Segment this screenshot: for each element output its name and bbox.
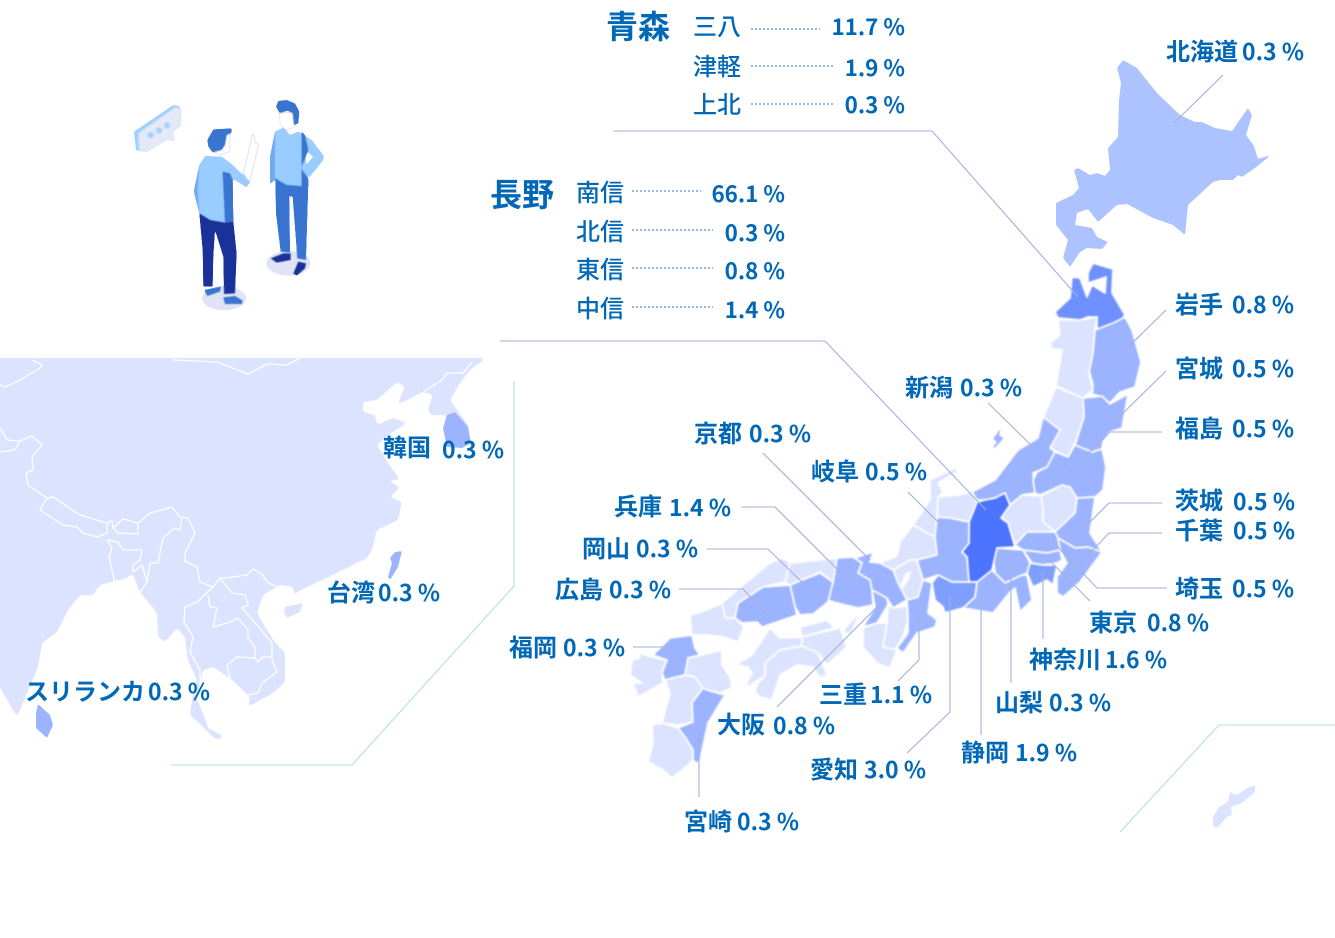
leader lines [500, 75, 1223, 797]
nara [883, 605, 908, 650]
yamagata [1043, 387, 1084, 457]
hyogo [828, 557, 873, 608]
miyazaki [678, 688, 725, 764]
label: kanagawa [1029, 640, 1167, 675]
row: kamikita: 0.3 % [845, 88, 905, 120]
label: aichi [810, 750, 926, 785]
kagoshima [648, 723, 693, 778]
okinawa frame line [1120, 725, 1335, 832]
label: ibaraki [1175, 481, 1295, 517]
illustration: two people talking [134, 100, 324, 310]
label: shizuoka [961, 733, 1077, 768]
label: hiroshima: 広島 [555, 570, 603, 605]
label: saitama: 0.5 % [1232, 570, 1294, 604]
row: toshin [576, 250, 785, 286]
label: miyagi: 宮城 [1175, 349, 1223, 384]
miyagi [1075, 394, 1128, 452]
label: fukuoka [509, 628, 625, 663]
label: taiwan [327, 573, 440, 608]
row: nanshin: 66.1 % [711, 177, 785, 209]
kanagawa [1027, 563, 1057, 587]
asia landmass [0, 358, 486, 739]
label: gifu: 岐阜 [811, 452, 859, 487]
label: korea [383, 428, 504, 465]
label: yamanashi: 山梨 [995, 683, 1043, 718]
label: hokkaido [1166, 32, 1304, 67]
label: hyogo: 兵庫 [614, 487, 662, 522]
speech bubble [134, 105, 181, 152]
row: kamikita [693, 85, 905, 120]
label: miyagi: 0.5 % [1232, 350, 1294, 384]
country borders [0, 358, 472, 695]
row: sanpachi: 三八 [693, 7, 741, 42]
gifu [917, 517, 969, 582]
label: okayama [582, 529, 698, 564]
niigata [972, 417, 1060, 505]
label: ibaraki: 茨城 [1175, 481, 1223, 516]
label: fukuoka: 0.3 % [563, 629, 625, 663]
ibaraki [1055, 497, 1102, 552]
label: iwate: 岩手 [1175, 285, 1223, 320]
label: gifu: 0.5 % [865, 453, 927, 487]
kumamoto [662, 675, 703, 725]
fukuoka [653, 635, 700, 680]
wakayama [863, 623, 897, 668]
label: niigata: 0.3 % [960, 369, 1022, 403]
row: chushin: 1.4 % [725, 293, 785, 325]
sado [992, 426, 1005, 449]
iwate [1089, 317, 1141, 403]
person in navy trousers [194, 128, 259, 310]
row: toshin: 0.8 % [725, 254, 785, 286]
label: saitama [1175, 569, 1294, 604]
label: fukushima: 0.5 % [1232, 410, 1294, 444]
akita [1050, 317, 1097, 398]
label: korea: 韓国 [383, 428, 431, 463]
yamaguchi [690, 603, 744, 642]
fukui [880, 525, 937, 570]
label: kyoto: 京都 [694, 414, 742, 449]
kyoto [855, 552, 907, 608]
yamanashi [993, 548, 1030, 583]
osaka [863, 590, 888, 627]
label: mie [819, 675, 932, 710]
tokyo [1023, 550, 1062, 565]
label: kyoto: 0.3 % [749, 415, 811, 449]
label: tokyo: 東京 [1089, 603, 1137, 638]
label: osaka [717, 705, 835, 741]
panel: nagano breakdown [490, 170, 785, 325]
label: hiroshima: 0.3 % [609, 571, 671, 605]
ishikawa [913, 467, 957, 537]
label: kanagawa: 神奈川 [1029, 640, 1101, 675]
label: niigata: 新潟 [905, 368, 953, 403]
row: chushin: 中信 [576, 289, 624, 324]
okayama [790, 573, 833, 615]
tochigi [1041, 485, 1077, 532]
ehime [735, 628, 802, 688]
hiroshima [735, 585, 797, 627]
tottori [785, 558, 837, 585]
row: hokushin: 0.3 % [725, 216, 785, 248]
label: taiwan: 台湾 [327, 573, 375, 608]
toyama [937, 492, 977, 522]
row: sanpachi [693, 7, 905, 42]
row: sanpachi: 11.7 % [831, 10, 905, 42]
label: ibaraki: 0.5 % [1233, 483, 1295, 517]
aomori [1055, 263, 1125, 329]
heading: 青森 [606, 2, 670, 48]
label: miyazaki [684, 802, 799, 837]
label: gifu [811, 452, 927, 487]
kochi [755, 646, 827, 700]
label: sri lanka: スリランカ [25, 672, 145, 707]
label: fukuoka: 福岡 [509, 628, 557, 663]
kagawa [800, 620, 835, 637]
japan map [630, 60, 1271, 778]
icon: okinawa [1213, 785, 1255, 827]
heading: 長野 [490, 170, 554, 216]
nagano [962, 493, 1015, 582]
label: iwate: 0.8 % [1232, 286, 1294, 320]
label: mie: 1.1 % [870, 676, 932, 710]
label: sri lanka: 0.3 % [148, 673, 210, 707]
fukushima [1033, 445, 1106, 498]
aichi [932, 575, 977, 613]
label: miyazaki: 0.3 % [737, 803, 799, 837]
label: fukushima: 福島 [1175, 409, 1223, 444]
icon: lake biwa [901, 570, 911, 589]
label: aichi: 3.0 % [864, 751, 926, 785]
asia map panel [0, 358, 514, 765]
row: hokushin [576, 212, 785, 248]
label: hyogo [614, 487, 731, 523]
label: chiba: 0.5 % [1233, 512, 1295, 546]
row: tsugaru [693, 47, 905, 83]
chiba [1057, 538, 1102, 597]
label: osaka: 大阪 [717, 705, 765, 740]
row: tsugaru: 1.9 % [845, 51, 905, 83]
label: iwate [1175, 285, 1294, 320]
label: shizuoka: 1.9 % [1015, 734, 1077, 768]
label: chiba: 千葉 [1175, 511, 1223, 546]
row: toshin: 東信 [576, 250, 624, 285]
label: hokkaido: 0.3 % [1242, 33, 1304, 67]
label: aichi: 愛知 [810, 750, 858, 785]
label: okayama: 0.3 % [636, 530, 698, 564]
label: hyogo: 1.4 % [669, 489, 731, 523]
label: saitama: 埼玉 [1175, 569, 1223, 604]
tokushima [802, 628, 847, 665]
mie [897, 580, 937, 653]
label: kyoto [694, 414, 811, 449]
label: shizuoka: 静岡 [961, 733, 1009, 768]
label: miyazaki: 宮崎 [684, 802, 732, 837]
row: nanshin [576, 173, 785, 209]
hainan [284, 603, 303, 618]
asia frame line [171, 381, 514, 765]
label: kanagawa: 1.6 % [1105, 641, 1167, 675]
label: taiwan: 0.3 % [378, 574, 440, 608]
person in blue trousers [266, 100, 324, 276]
saitama [1015, 532, 1060, 553]
oita [685, 650, 732, 693]
row: tsugaru: 津軽 [693, 47, 741, 82]
label: yamanashi: 0.3 % [1049, 684, 1111, 718]
row: nanshin: 南信 [576, 173, 624, 208]
label: yamanashi [995, 683, 1111, 718]
label: osaka: 0.8 % [773, 707, 835, 741]
gunma [1001, 495, 1055, 545]
label: sri lanka [25, 672, 210, 707]
label: chiba [1175, 511, 1295, 546]
sri lanka [36, 704, 53, 738]
label: okayama: 岡山 [582, 529, 630, 564]
label: niigata [905, 368, 1022, 403]
label: hiroshima [555, 570, 671, 605]
label: korea: 0.3 % [442, 431, 504, 465]
label: tokyo [1089, 603, 1209, 638]
awaji [843, 612, 860, 634]
shiga [893, 560, 923, 600]
korea [443, 412, 471, 448]
shimane [722, 558, 790, 618]
row: kamikita: 上北 [693, 85, 741, 120]
saga nagasaki [630, 653, 667, 697]
panel: aomori breakdown [606, 2, 905, 120]
label: mie: 三重 [819, 675, 867, 710]
row: hokushin: 北信 [576, 212, 624, 247]
row: chushin [576, 289, 785, 325]
label: fukushima [1175, 409, 1294, 444]
label: tokyo: 0.8 % [1147, 604, 1209, 638]
label: hokkaido: 北海道 [1166, 32, 1238, 67]
shizuoka [963, 570, 1032, 613]
taiwan [388, 551, 402, 580]
hokkaido [1056, 60, 1271, 267]
label: miyagi [1175, 349, 1294, 384]
